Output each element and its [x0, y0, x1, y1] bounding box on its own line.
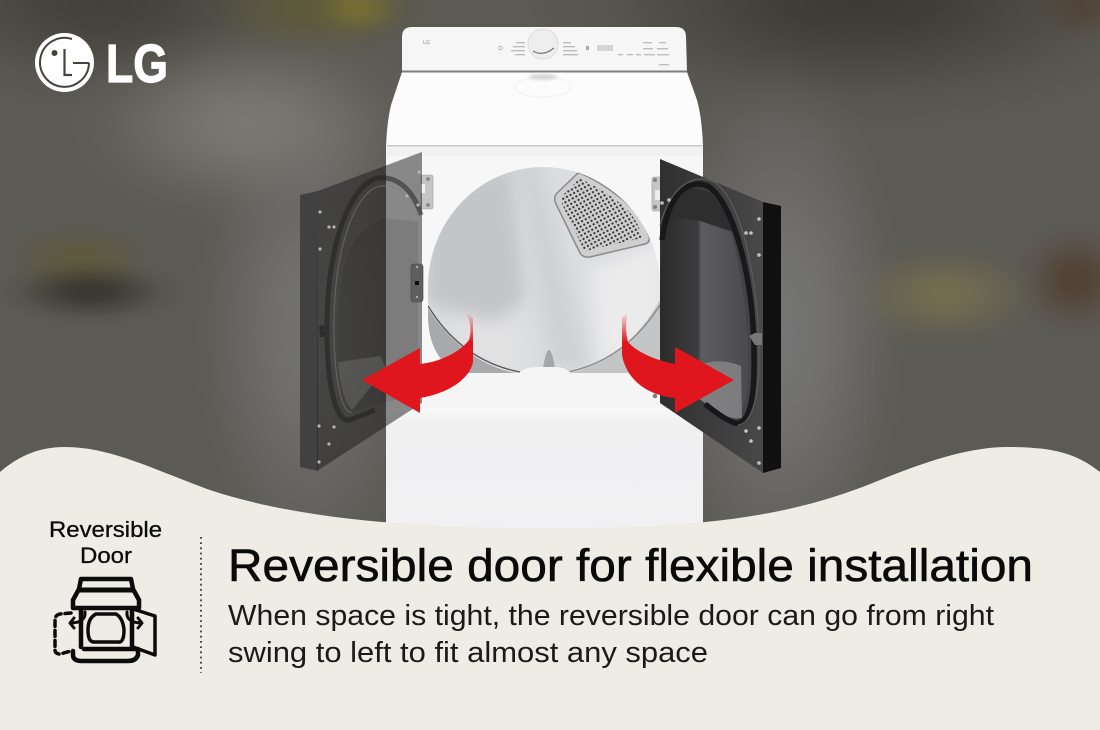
drum hump: [519, 367, 571, 373]
badge label: Door: [80, 543, 132, 568]
red arrow left: [362, 312, 473, 413]
description: swing to left to fit almost any space: [228, 637, 708, 669]
door latch: [411, 264, 423, 302]
drum rim: [428, 309, 514, 373]
left door hinge: [415, 175, 433, 209]
control panel markings: LG: [423, 40, 430, 46]
description: When space is tight, the reversible door can go from right: [228, 600, 994, 632]
cream wave panel: [0, 447, 1100, 730]
drum fin: [543, 350, 555, 368]
red arrow right: [622, 312, 734, 413]
door gasket: [327, 178, 421, 420]
right door hinge: [652, 177, 665, 398]
heading: Reversible door for flexible installation: [228, 540, 1033, 591]
LG logo: [35, 33, 168, 94]
logo emblem: [35, 33, 94, 92]
badge label: Reversible: [49, 517, 162, 542]
dryer body: [386, 27, 703, 530]
door gasket: [662, 184, 754, 423]
door screws: [317, 170, 421, 464]
right door: [660, 159, 781, 473]
drum opening: [428, 167, 660, 373]
feature badge: [49, 517, 168, 661]
control panel markings: [423, 29, 669, 65]
dotted divider: [200, 537, 202, 673]
door window: [338, 218, 418, 412]
lint filter: [555, 173, 650, 257]
door screws: [660, 198, 761, 465]
door lip and lower panel: [386, 373, 703, 408]
left door, translucent: [300, 152, 423, 471]
icon: dryer with reversible door: [55, 579, 155, 661]
top lid: [386, 72, 703, 146]
cabinet front: [386, 146, 703, 518]
control panel: [402, 27, 687, 71]
logo wordmark: LG: [106, 34, 168, 94]
door window: [660, 189, 749, 419]
